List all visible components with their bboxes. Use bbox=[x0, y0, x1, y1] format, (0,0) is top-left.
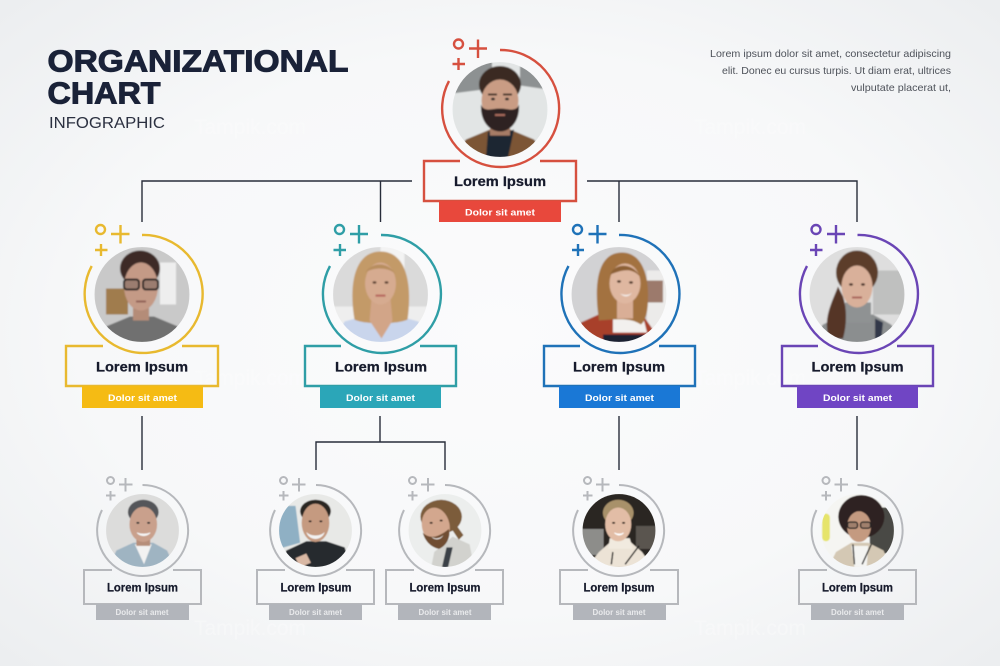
role bar bbox=[439, 201, 561, 222]
portrait bbox=[94, 246, 190, 342]
name box bbox=[386, 570, 503, 604]
name box bbox=[782, 346, 933, 386]
name: Lorem Ipsum bbox=[335, 358, 427, 374]
node: purple manager bbox=[782, 225, 933, 408]
sparkle icons bbox=[106, 477, 132, 500]
sparkle icons bbox=[583, 477, 610, 500]
node: staff 4 bbox=[560, 477, 678, 620]
sparkle icons bbox=[334, 225, 368, 256]
ring bbox=[561, 235, 679, 353]
watermarks: Tampik.com bbox=[194, 367, 306, 390]
name box bbox=[305, 346, 456, 386]
watermarks: Tampik.com bbox=[694, 617, 806, 640]
name: Lorem Ipsum bbox=[280, 582, 352, 594]
description text: Lorem ipsum dolor sit amet, consectetur adipiscing bbox=[710, 48, 951, 60]
name: Lorem Ipsum bbox=[454, 173, 546, 189]
name box bbox=[560, 570, 678, 604]
sparkle icons bbox=[95, 225, 130, 256]
node: yellow manager bbox=[66, 225, 218, 408]
watermarks: Tampik.com bbox=[194, 116, 306, 139]
role: Dolor sit amet bbox=[831, 608, 884, 617]
name box bbox=[257, 570, 374, 604]
ring bbox=[270, 485, 361, 576]
sparkle icons bbox=[572, 225, 606, 256]
ring bbox=[812, 485, 903, 576]
portrait bbox=[809, 246, 905, 342]
sparkle icons bbox=[452, 40, 487, 70]
watermarks: Tampik.com bbox=[694, 367, 806, 390]
name box bbox=[799, 570, 916, 604]
role bar bbox=[811, 604, 904, 620]
ring bbox=[442, 50, 559, 167]
name: Lorem Ipsum bbox=[584, 582, 654, 594]
description text: vulputate placerat ut, bbox=[851, 82, 951, 94]
name box bbox=[66, 346, 218, 386]
role bar bbox=[269, 604, 362, 620]
title: INFOGRAPHIC bbox=[49, 115, 165, 132]
portrait bbox=[279, 494, 352, 567]
ring bbox=[573, 485, 664, 576]
role bar bbox=[573, 604, 666, 620]
ring bbox=[399, 485, 490, 576]
role bar bbox=[559, 386, 680, 408]
role: Dolor sit amet bbox=[465, 208, 536, 218]
portrait bbox=[408, 494, 482, 567]
name: Lorem Ipsum bbox=[573, 358, 665, 374]
role: Dolor sit amet bbox=[592, 608, 646, 617]
ring bbox=[323, 235, 441, 353]
watermarks bbox=[194, 116, 806, 640]
role: Dolor sit amet bbox=[346, 393, 416, 404]
role bar bbox=[96, 604, 189, 620]
name box bbox=[84, 570, 201, 604]
watermarks: Tampik.com bbox=[694, 116, 806, 139]
node: staff 3 bbox=[386, 477, 503, 620]
description text: elit. Donec eu cursus turpis. Ut diam erat, ultrices bbox=[722, 65, 951, 77]
node: blue manager bbox=[544, 225, 695, 408]
role: Dolor sit amet bbox=[108, 393, 178, 404]
portrait bbox=[332, 246, 428, 342]
role: Dolor sit amet bbox=[289, 608, 342, 617]
sparkle icons bbox=[408, 477, 434, 500]
role bar bbox=[797, 386, 918, 408]
description text bbox=[710, 48, 951, 94]
role: Dolor sit amet bbox=[585, 393, 655, 404]
role: Dolor sit amet bbox=[116, 608, 169, 617]
portrait bbox=[106, 494, 179, 567]
ring bbox=[800, 235, 918, 353]
name: Lorem Ipsum bbox=[107, 582, 178, 594]
portrait bbox=[452, 62, 548, 158]
name: Lorem Ipsum bbox=[812, 358, 904, 374]
watermarks: Tampik.com bbox=[194, 617, 306, 640]
sparkle icons bbox=[279, 477, 306, 500]
role bar bbox=[82, 386, 203, 408]
role: Dolor sit amet bbox=[823, 393, 893, 404]
title: ORGANIZATIONAL bbox=[48, 44, 348, 78]
node: staff 1 bbox=[84, 477, 201, 620]
portrait bbox=[571, 246, 667, 342]
portrait bbox=[582, 494, 656, 567]
name: Lorem Ipsum bbox=[410, 582, 480, 594]
node: teal manager bbox=[305, 225, 456, 408]
ring bbox=[85, 235, 203, 353]
node: staff 5 bbox=[799, 477, 916, 620]
node: staff 2 bbox=[257, 477, 374, 620]
portrait bbox=[821, 494, 894, 567]
sparkle icons bbox=[822, 477, 848, 500]
sparkle icons bbox=[810, 225, 845, 256]
title: CHART bbox=[48, 76, 161, 110]
role bar bbox=[398, 604, 491, 620]
role bar bbox=[320, 386, 441, 408]
name box bbox=[544, 346, 695, 386]
name box bbox=[424, 161, 576, 201]
connector lines bbox=[142, 181, 857, 470]
role: Dolor sit amet bbox=[418, 608, 472, 617]
node: top executive bbox=[424, 40, 576, 222]
name: Lorem Ipsum bbox=[96, 358, 188, 374]
title bbox=[48, 44, 348, 132]
name: Lorem Ipsum bbox=[822, 582, 893, 594]
ring bbox=[97, 485, 188, 576]
